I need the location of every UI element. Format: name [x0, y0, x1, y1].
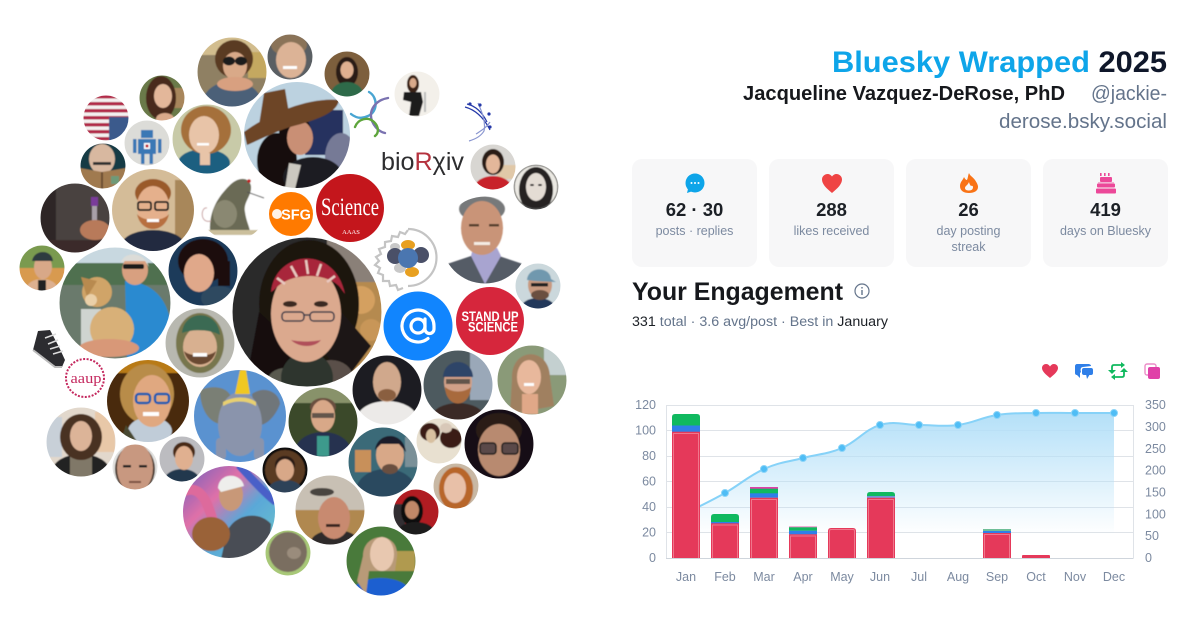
stat card: days on Bluesky — [1043, 159, 1168, 267]
stat card: posts and replies: 62 · 30 — [666, 199, 723, 220]
avatar: bald man in white tee — [352, 356, 422, 424]
stat card: posting streak: streak — [951, 240, 986, 254]
month labels: Jun — [870, 570, 890, 584]
stat card: days on Bluesky: days on Bluesky — [1060, 224, 1152, 238]
month labels: Feb — [714, 570, 736, 584]
left axis labels: 60 — [642, 474, 656, 488]
area under cumulative line — [686, 413, 1114, 558]
avatar: woman in brown hat — [244, 82, 350, 188]
stat card: likes received: 288 — [816, 199, 847, 220]
stat card: posting streak: day posting — [937, 224, 1001, 238]
avatar: man on dark ring — [262, 448, 308, 492]
logo: Stand Up for Science: STAND UP — [462, 308, 518, 324]
left axis labels: 20 — [642, 526, 656, 540]
chart legend icons — [1042, 362, 1160, 380]
handle: derose.bsky.social — [999, 111, 1167, 133]
avatar: woman in sunglasses — [198, 38, 266, 106]
avatar: woman with red backdrop — [394, 490, 438, 534]
right axis labels: 50 — [1145, 529, 1159, 543]
stat card: likes received: likes received — [794, 224, 869, 238]
legend icon: replies — [1075, 364, 1093, 379]
logo: Science: AAAS — [342, 229, 360, 236]
avatar: wombat illustration — [265, 530, 311, 576]
month labels: Jan — [676, 570, 696, 584]
legend icon: likes — [1042, 364, 1058, 378]
icon: heart — [822, 174, 842, 193]
handle: @jackie- — [1091, 83, 1167, 105]
avatar: man with blue glasses — [106, 359, 190, 445]
avatar: man in green cap and hood — [165, 308, 235, 378]
stat card: posts and replies: posts · replies — [656, 224, 733, 238]
month labels: May — [830, 570, 855, 584]
logo: SFG: SFG — [281, 208, 311, 224]
avatar: woman with curly hair — [46, 408, 116, 476]
month labels: Oct — [1026, 570, 1046, 584]
avatar: man in blue cap — [516, 264, 560, 308]
avatar: smiling man, top — [267, 34, 313, 80]
right axis labels: 0 — [1145, 551, 1152, 565]
avatar: man with dark curly hair — [168, 236, 238, 310]
left axis labels: 120 — [635, 398, 656, 412]
icon: birthday cake — [1096, 173, 1116, 194]
left axis labels: 80 — [642, 449, 656, 463]
month labels: Apr — [793, 570, 813, 584]
avatar bubble cluster — [19, 34, 568, 608]
icon: high-top sneaker — [33, 330, 65, 367]
handle — [999, 83, 1167, 133]
right axis labels: 350 — [1145, 398, 1166, 412]
left axis labels: 40 — [642, 500, 656, 514]
month labels: Sep — [986, 570, 1008, 584]
month labels — [676, 570, 1125, 584]
icon: info — [855, 284, 869, 298]
right axis labels: 200 — [1145, 464, 1166, 478]
avatar: woman with red hair — [433, 463, 479, 511]
avatar: man in navy cap with beard — [423, 350, 494, 431]
left axis labels — [635, 398, 656, 565]
logo: interlocking arcs — [351, 92, 388, 136]
bar: April — [789, 526, 817, 558]
bar: September — [983, 529, 1011, 558]
avatar: blonde woman in blue — [346, 526, 416, 596]
avatar: man with cap on swirl background holding dog — [182, 465, 276, 559]
avatar: woman with brown hair — [140, 76, 184, 120]
avatar: upside-down US flag — [83, 95, 129, 141]
logo: Stand Up for Science: SCIENCE — [468, 318, 518, 334]
avatar: woman in red — [470, 144, 516, 190]
logo: at sign circle — [384, 292, 452, 360]
right axis labels: 150 — [1145, 486, 1166, 500]
heading: Your Engagement: Your Engagement — [632, 278, 844, 306]
logo: blue splash — [465, 103, 491, 141]
avatar: older man in suit — [448, 196, 522, 284]
bar: October — [1022, 555, 1050, 558]
engagement summary: 331 total · 3.6 avg/post · Best in January — [632, 314, 888, 329]
avatar: balding man — [112, 444, 158, 490]
avatar: man in blue shirt with dog — [59, 247, 171, 359]
logo: AAUP badge — [66, 359, 104, 397]
avatar: woman smiling, teal top — [172, 104, 242, 177]
avatar: man with red beard and glasses — [112, 169, 194, 251]
right axis labels — [1145, 398, 1166, 565]
avatar: Dumbo figurine — [193, 369, 287, 463]
stat card: posting streak — [906, 159, 1031, 267]
line points — [722, 410, 1118, 496]
logo: bioRxiv: bioRχiv — [381, 148, 464, 176]
bar: June — [867, 492, 895, 558]
bar: March — [750, 487, 778, 558]
stat card: posts and replies — [632, 159, 757, 267]
logo: Stand Up for Science — [456, 287, 524, 355]
left axis labels: 0 — [649, 551, 656, 565]
avatar: main portrait with bandana — [232, 238, 382, 386]
logo: Science — [316, 174, 384, 242]
avatar: hand holding vial — [40, 183, 110, 254]
stat card: likes received — [769, 159, 894, 267]
avatar: bald man with mustache — [296, 476, 364, 544]
avatar: blonde woman with long hair — [497, 345, 568, 415]
left axis labels: 100 — [635, 424, 656, 438]
icon: chat bubble — [686, 174, 704, 193]
stat card: posting streak: 26 — [958, 199, 979, 220]
avatar: man in blue sweater — [348, 428, 418, 496]
avatar: rat thinker sculpture — [201, 178, 264, 236]
month labels: Mar — [753, 570, 775, 584]
logo: gear with petals — [375, 229, 436, 290]
logo: AAUP badge: aaup — [70, 371, 102, 387]
avatar: man with dark hair and glasses — [464, 409, 534, 479]
right axis labels: 100 — [1145, 508, 1166, 522]
right axis labels: 300 — [1145, 420, 1166, 434]
avatar: woman in green — [324, 52, 370, 96]
logo: Science: Science — [321, 194, 379, 221]
month labels: Jul — [911, 570, 927, 584]
avatar: woman at desk — [394, 71, 440, 117]
avatar: person with grey hair and glasses — [288, 388, 358, 456]
month labels: Aug — [947, 570, 969, 584]
right axis labels: 250 — [1145, 442, 1166, 456]
legend icon: reposts — [1108, 362, 1128, 380]
month labels: Dec — [1103, 570, 1125, 584]
avatar: young man with dark hair — [160, 436, 204, 482]
cumulative line — [686, 413, 1114, 513]
bar: May — [828, 528, 856, 558]
logo: SFG — [269, 192, 313, 236]
gridlines — [666, 405, 1134, 558]
avatar: man in dark cap outdoors — [20, 246, 64, 290]
bar: February — [711, 514, 739, 558]
avatar: blue robot — [124, 120, 170, 166]
display name: Jacqueline Vazquez-DeRose, PhD — [743, 83, 1065, 105]
combined bar and line chart — [635, 398, 1166, 584]
avatar: bald man behind book — [80, 143, 126, 190]
month labels: Nov — [1064, 570, 1087, 584]
stat card: days on Bluesky: 419 — [1090, 199, 1121, 220]
icon: flame — [960, 173, 978, 193]
bar: January — [672, 414, 700, 558]
legend icon: quotes — [1145, 364, 1160, 379]
avatar: black and white portrait — [514, 164, 558, 210]
title: Bluesky Wrapped 2025 — [832, 46, 1167, 79]
avatar: sepia vintage photo — [416, 418, 462, 464]
